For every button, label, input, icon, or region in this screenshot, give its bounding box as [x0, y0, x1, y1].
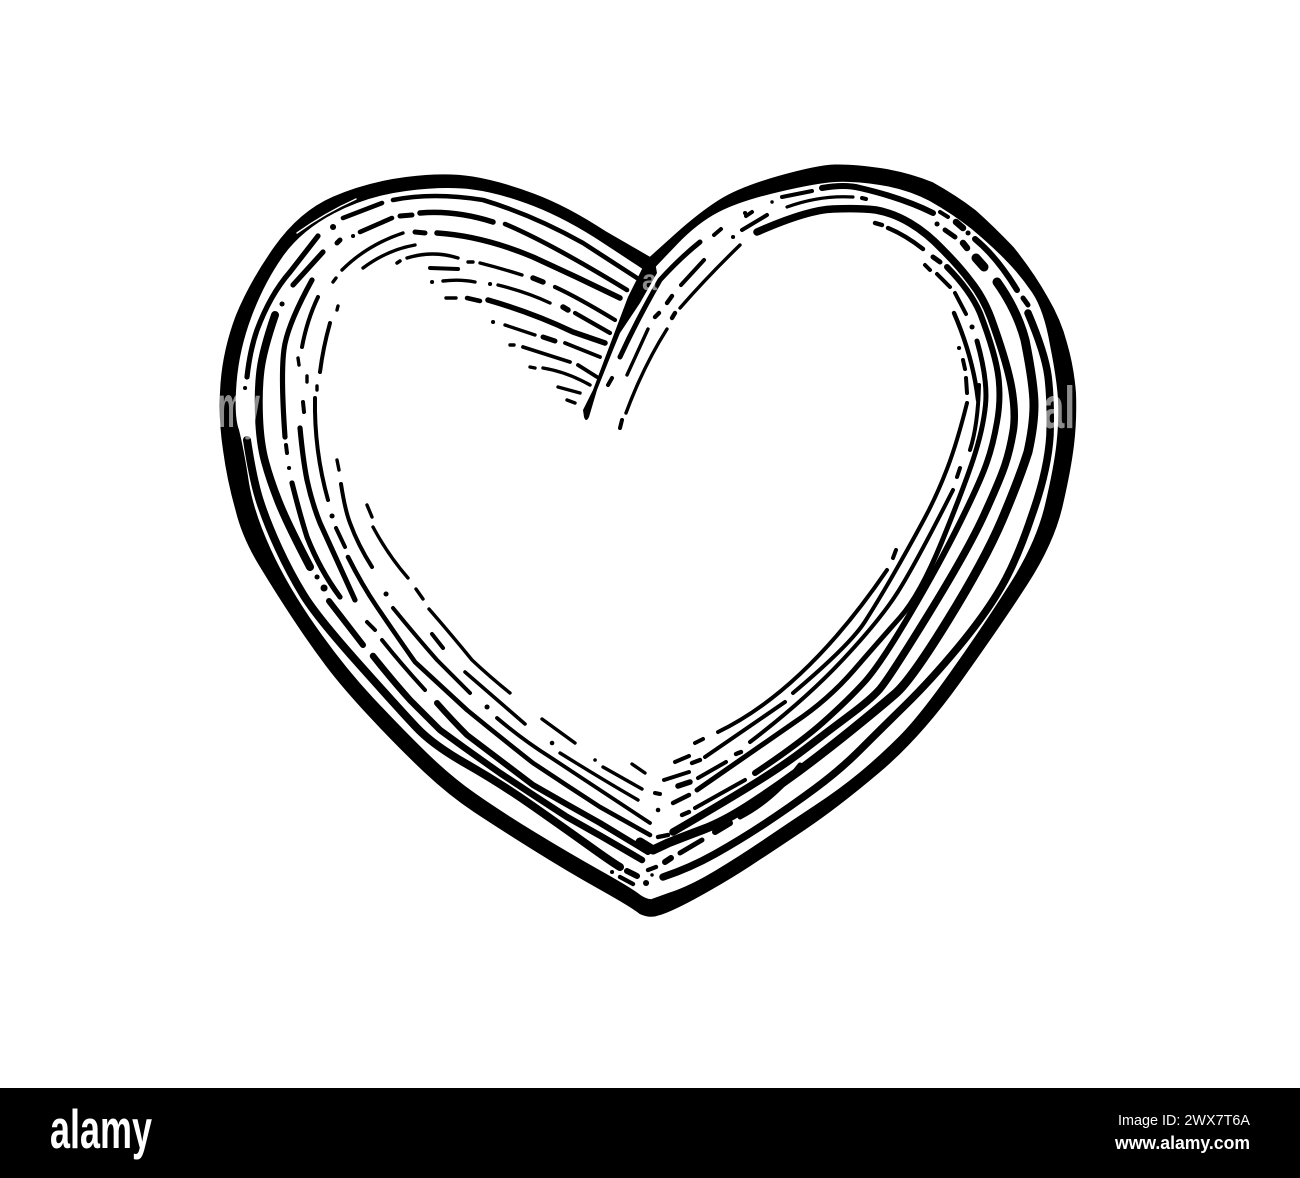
image id: Image ID: 2WX7T6A [1118, 1112, 1250, 1129]
top left curved hatching [342, 196, 637, 298]
scattered engraving dots [245, 198, 972, 883]
right lobe fine contour lines [608, 191, 1028, 757]
right lobe heavy contour lines [640, 186, 1050, 877]
heart outer outline band [221, 165, 1075, 916]
left lobe medium contour lines [247, 236, 650, 835]
grey watermark fragments on the outline [218, 264, 1075, 441]
footer bar [0, 1088, 1300, 1178]
bottom point hatching [620, 739, 800, 884]
alamy logo: alamy [50, 1098, 152, 1160]
engraved heart illustration [218, 165, 1075, 916]
cleft stroke [583, 259, 657, 420]
website: www.alamy.com [1114, 1133, 1250, 1153]
white sliver in outline [297, 199, 356, 233]
hatching under the left lobe near the cleft [407, 254, 615, 403]
grey watermark fragments on the outline: my [218, 374, 260, 440]
left lobe heavy contour lines [247, 315, 648, 867]
grey watermark fragments on the outline: al [1043, 375, 1075, 441]
grey watermark fragments on the outline: a [642, 264, 657, 297]
left lobe fine contour lines [302, 297, 650, 823]
